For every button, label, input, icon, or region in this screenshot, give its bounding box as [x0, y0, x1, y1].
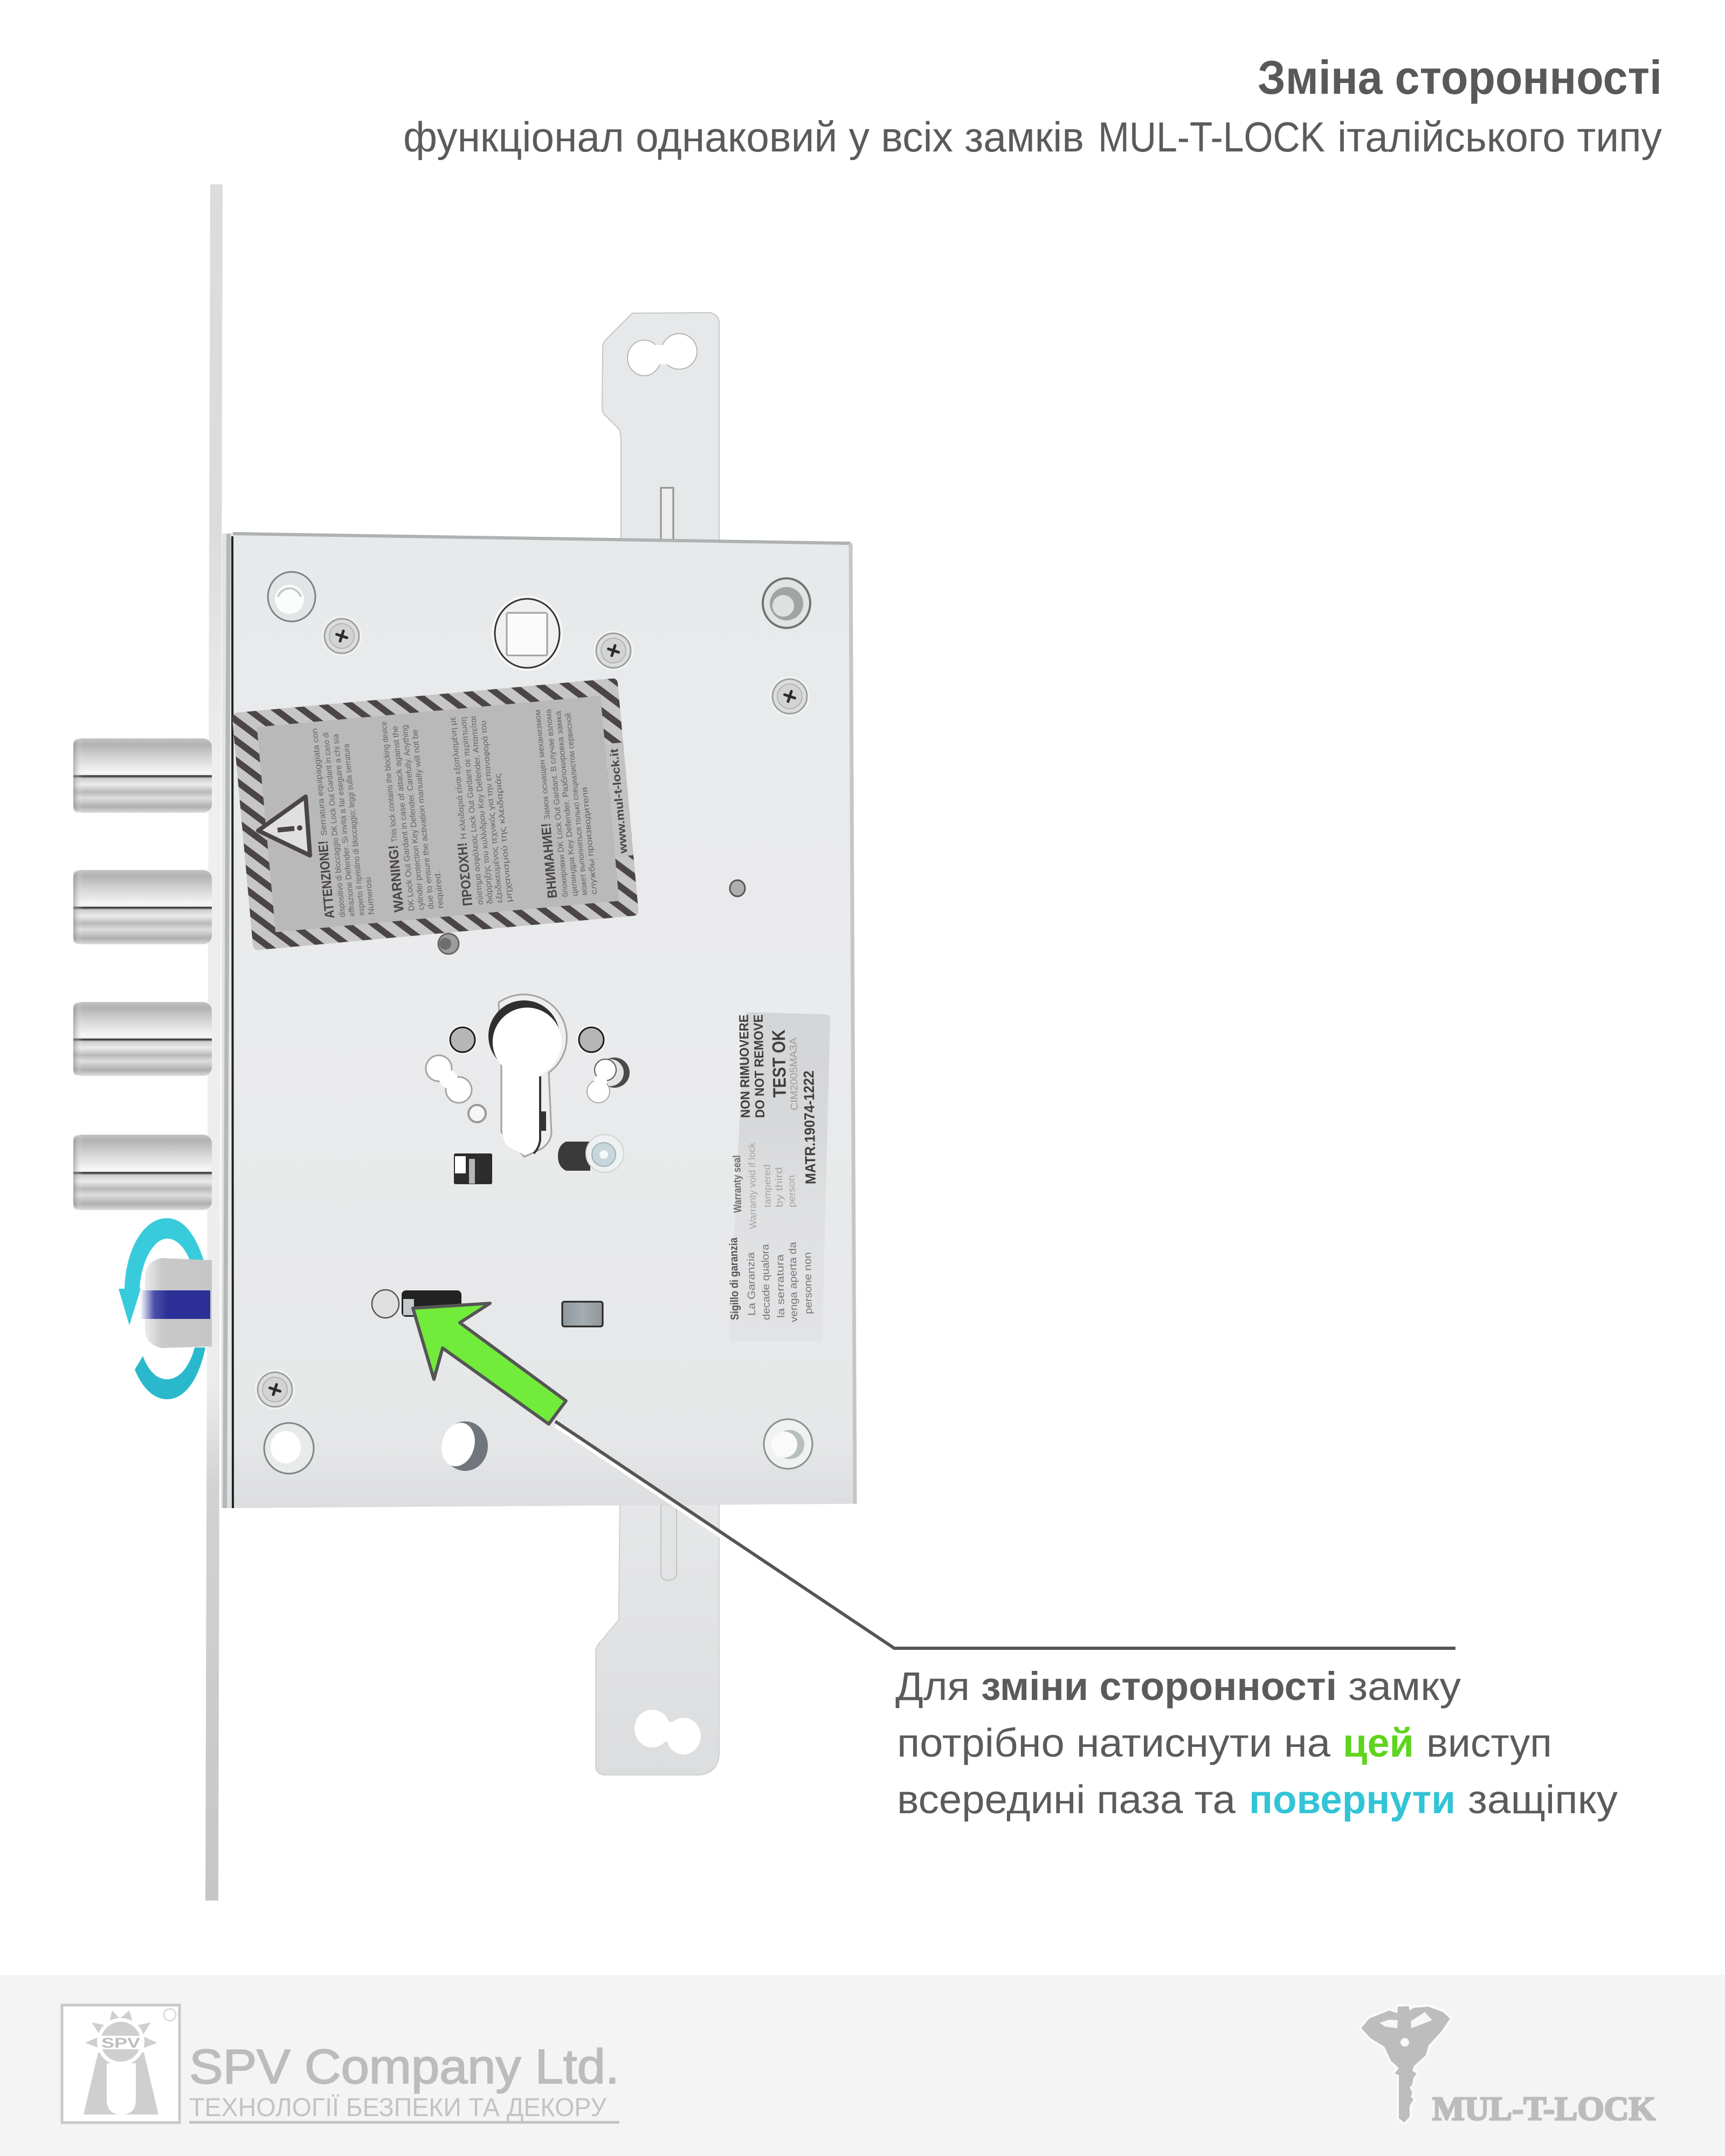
emblem disk: SPV: [101, 2035, 141, 2051]
emblem disk: [97, 2018, 144, 2065]
top strap hole join: [650, 345, 671, 364]
callout text: цей: [1343, 1720, 1414, 1765]
sticker text: Sigillo di garanzia: [727, 1238, 741, 1320]
top strap plate: [602, 313, 719, 542]
bolt 3: [73, 1002, 212, 1076]
warning text blocks: ВНИМАНИЕ!: [539, 823, 561, 899]
icon: teal rotation arrow, upper arc: [119, 1218, 205, 1325]
bottom strap slot: [661, 1505, 677, 1580]
right slot with screw: [558, 1135, 624, 1172]
emblem figure: [84, 2053, 158, 2114]
keyhole white opening: [493, 1007, 562, 1155]
lock body: [221, 533, 855, 1508]
small dot under label: [438, 934, 459, 954]
small circle right: [577, 1025, 606, 1054]
black seam: [232, 536, 233, 1508]
screw 1: [322, 616, 362, 656]
warning text blocks: required.: [433, 870, 445, 909]
callout text: виступ: [1426, 1720, 1552, 1765]
square bolt slot: [454, 1153, 492, 1184]
logo: Mul-T-Lock key: [1361, 2006, 1450, 2123]
warning text blocks: Η κλειδαριά είναι εξοπλισμένη με: [448, 716, 468, 840]
top strap hole left: [627, 340, 661, 376]
warning text blocks: ATTENZIONE!: [315, 840, 337, 919]
sticker text: by third: [774, 1167, 785, 1207]
screw 2: [594, 631, 633, 671]
rivet bottom left: [264, 1423, 314, 1474]
icon: teal rotation arrow, lower arc: [135, 1348, 205, 1399]
key shape: [1361, 2006, 1450, 2123]
left lobed cutout: [426, 1055, 472, 1103]
slot round end: [372, 1290, 399, 1318]
icon: warning triangle: [258, 797, 310, 855]
spindle hole: [492, 596, 563, 671]
logo tagline: ТЕХНОЛОГІЇ БЕЗПЕКИ ТА ДЕКОРУ: [189, 2093, 606, 2122]
hazard stripe border: [232, 678, 639, 950]
subtitle: італійського типу: [1337, 113, 1662, 161]
icon: green arrow: [413, 1303, 566, 1424]
rivet bottom right: [764, 1419, 812, 1469]
small circle left: [448, 1025, 477, 1054]
top strap hole right: [661, 334, 697, 369]
sticker text: la serratura: [775, 1254, 787, 1318]
sticker text: Warranty seal: [731, 1155, 744, 1213]
bottom strap hole left: [634, 1710, 670, 1747]
leader stroke: [555, 1421, 1455, 1648]
top strap slot: [661, 488, 673, 542]
keyhole dark crescent: [488, 1000, 560, 1072]
faceplate: [205, 184, 223, 1901]
lower slot: [372, 1290, 461, 1318]
sticker text: DO NOT REMOVE: [751, 1014, 768, 1118]
label panel: [232, 678, 639, 950]
latch blue band: [140, 1290, 210, 1319]
latch body: [145, 1258, 212, 1348]
callout text: Для: [895, 1664, 970, 1709]
sticker text: decade qualora: [760, 1243, 772, 1320]
sticker text: TEST OK: [769, 1029, 790, 1098]
sticker text: CIM2005MA3A: [788, 1038, 801, 1110]
left edge: [225, 534, 229, 1508]
callout text: [895, 1664, 1618, 1822]
callout text: всередині паза та: [897, 1777, 1236, 1822]
warning text blocks: WARNING!: [385, 845, 407, 913]
warning text blocks: Замок оснащен механизмом: [533, 709, 552, 820]
screw bottom left: [255, 1370, 295, 1409]
sticker text: persone non: [802, 1252, 815, 1314]
warning text blocks: цилиндра Key Defender. Разблокировка замка: [554, 710, 579, 896]
slot black opening: [402, 1290, 461, 1317]
body plate: [226, 533, 855, 1508]
callout text: зміни сторонності: [981, 1664, 1337, 1709]
sticker text: [727, 1014, 819, 1322]
round hole bottom: [437, 1419, 488, 1471]
small hole: [468, 1105, 486, 1122]
emblem rays: [85, 2010, 157, 2048]
warning text blocks: μηχανισμού της κλειδαριάς: [493, 773, 514, 903]
side edge: [221, 534, 235, 1508]
emblem frame: [62, 2005, 180, 2123]
sticker text: La Garanzia: [746, 1252, 758, 1316]
logo text: SPV Company Ltd: SPV Company Ltd.: [189, 2040, 619, 2094]
footer band: [0, 1975, 1725, 2156]
bottom strike strap: [596, 1498, 719, 1775]
top strike strap: [602, 313, 719, 542]
warning text blocks: This lock contains the blocking device: [380, 721, 399, 842]
web address: www.mul-t-lock.it: [608, 748, 630, 854]
sticker text: MATR.19074-1222: [801, 1070, 819, 1184]
top edge: [233, 534, 851, 543]
sticker text: venga aperta da: [787, 1241, 800, 1322]
warning text blocks: Numerosi: [364, 877, 376, 915]
warning text blocks: σύστημα ασφάλειας Lock Out Gardant σε περίπτωση: [459, 716, 485, 905]
title: Зміна сторонності: [1258, 51, 1662, 104]
warning text blocks: может выполняться только специалистом сервисной: [564, 713, 589, 896]
right lobed cutout: [587, 1058, 630, 1103]
sticker text: Warranty void if lock: [746, 1142, 758, 1229]
latch: [140, 1258, 212, 1348]
warning label: [232, 678, 639, 950]
bottom strap plate: [596, 1498, 719, 1775]
callout text: повернути: [1249, 1777, 1455, 1822]
warning text blocks: службы производителя: [580, 786, 599, 895]
logo: SPV emblem: [62, 2005, 180, 2123]
subtitle: функціонал однаковий у всіх замків: [403, 113, 1084, 161]
small dot right: [730, 880, 745, 896]
bolt 4: [73, 1135, 212, 1210]
bolt 2: [73, 870, 212, 944]
callout text: замку: [1348, 1664, 1461, 1709]
keyhole stem dark part: [540, 1111, 546, 1131]
warning text blocks: Serratura equipaggiata con: [310, 728, 329, 836]
sticker text: tampered: [762, 1164, 773, 1207]
warning text blocks: διάρρηξης του κυλίνδρου Key Defender. Απαιτείται: [468, 716, 495, 904]
keyhole outer ring: [499, 994, 567, 1157]
warning text blocks: esperto il ripristino di bloccaggio; leggi sulla serratura: [342, 743, 367, 916]
key openings: [1379, 2012, 1432, 2028]
warning text blocks: effrazione Defender. Si invita a far eseguire a chi sia: [331, 733, 357, 917]
registered mark: [164, 2009, 176, 2021]
rivet top right: [763, 578, 810, 628]
logo text: MUL-T-LOCK: MUL-T-LOCK: [1432, 2091, 1655, 2127]
sticker text: NON RIMUOVERE: [737, 1014, 753, 1118]
warning text blocks: cylinder protection Key Defender. Carefully. Anything: [400, 724, 426, 910]
subtitle: MUL-T-LOCK: [1098, 113, 1325, 161]
keyhole stem shadow: [534, 1076, 540, 1153]
logo underline: [189, 2121, 619, 2124]
warning text blocks: ΠΡΟΣΟΧΗ!: [455, 842, 475, 907]
leader white halo: [555, 1426, 892, 1651]
callout leader line: [555, 1421, 1455, 1651]
warning text blocks: блокировки DK Lock Out Gardant. В случае взлома: [544, 708, 570, 897]
warning text blocks: dispositivo di bloccaggio DK Lock Out Gardant in caso di: [321, 732, 347, 918]
test ok sticker: [727, 1012, 830, 1341]
sticker text: person: [786, 1175, 797, 1207]
slot silver tab: [403, 1299, 414, 1315]
key hole: [1400, 2038, 1409, 2047]
cylinder keyhole: [488, 994, 567, 1157]
bottom strap hole right: [666, 1718, 701, 1754]
subtitle: [403, 113, 1662, 161]
bolt 1: [73, 738, 212, 813]
right edge: [851, 543, 855, 1504]
small rectangle window: [562, 1302, 603, 1326]
warning text blocks: DK Lock Out Gardant in case of attack against the: [390, 725, 417, 911]
warning text blocks: εξειδικευμένος τεχνικός για την επαναφορά του: [479, 720, 505, 903]
web address background: [605, 742, 633, 857]
callout text: защіпку: [1468, 1777, 1618, 1822]
screw 3: [770, 676, 810, 716]
callout text: потрібно натиснути на: [897, 1720, 1331, 1765]
warning text blocks: [305, 703, 599, 919]
rivet top left: [268, 572, 315, 621]
bottom strap hole join: [659, 1722, 678, 1742]
warning text blocks: due to ensure the activation manually will not be: [410, 729, 436, 910]
sticker panel: [729, 1012, 830, 1341]
